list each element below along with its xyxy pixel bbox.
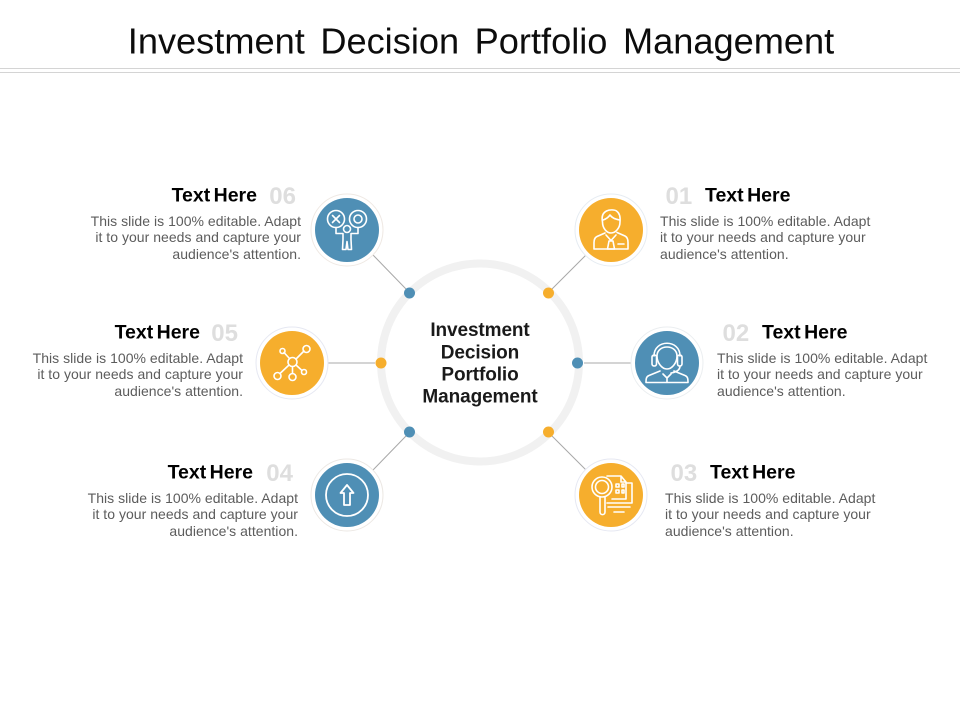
item 03: 03 bbox=[670, 460, 697, 487]
connector: 01 bbox=[543, 255, 586, 298]
item 04: Text Here bbox=[168, 462, 253, 484]
item 02: This slide is 100% editable. Adapt bbox=[717, 350, 927, 366]
item 03 bbox=[665, 460, 875, 539]
item 01: audience's attention. bbox=[660, 246, 789, 262]
center label: Investment bbox=[430, 320, 530, 341]
item 06: it to your needs and capture your bbox=[95, 229, 301, 245]
item 06 bbox=[91, 183, 301, 262]
item 02: it to your needs and capture your bbox=[717, 366, 923, 382]
item 03: it to your needs and capture your bbox=[665, 506, 871, 522]
center label: Portfolio bbox=[441, 364, 519, 386]
icon: 06 signs person bbox=[311, 194, 383, 266]
item 02 bbox=[717, 320, 927, 399]
item 05 bbox=[33, 320, 243, 399]
connector: 05 bbox=[328, 358, 386, 368]
connector: 06 bbox=[373, 255, 415, 298]
item 04: 04 bbox=[266, 460, 294, 487]
item 01: Text Here bbox=[705, 184, 791, 206]
icon: 03 magnifier document bbox=[575, 459, 647, 531]
connector: 02 bbox=[572, 358, 631, 368]
item 05: audience's attention. bbox=[114, 383, 243, 399]
item 02: Text Here bbox=[762, 322, 848, 344]
icon: 05 network nodes bbox=[256, 327, 328, 399]
icon: 01 businessman bbox=[575, 194, 647, 266]
item 04: This slide is 100% editable. Adapt bbox=[88, 490, 298, 506]
center ring bbox=[381, 264, 579, 462]
item 02: 02 bbox=[722, 320, 749, 347]
item 05: 05 bbox=[211, 320, 238, 347]
icon: 02 headset agent bbox=[631, 327, 703, 399]
item 06: audience's attention. bbox=[172, 246, 301, 262]
item 06: This slide is 100% editable. Adapt bbox=[91, 213, 301, 229]
item 03: audience's attention. bbox=[665, 523, 794, 539]
item 05: Text Here bbox=[115, 322, 200, 344]
center label: Decision bbox=[441, 342, 519, 364]
item 03: Text Here bbox=[710, 462, 796, 484]
item 04: it to your needs and capture your bbox=[92, 506, 298, 522]
icon: 04 up arrow bbox=[311, 459, 383, 531]
center label bbox=[422, 320, 538, 408]
item 05: This slide is 100% editable. Adapt bbox=[33, 350, 243, 366]
item 06: Text Here bbox=[172, 184, 257, 206]
title: Investment Decision Portfolio Management bbox=[128, 20, 834, 62]
item 01: it to your needs and capture your bbox=[660, 229, 866, 245]
item 03: This slide is 100% editable. Adapt bbox=[665, 490, 875, 506]
item 04: audience's attention. bbox=[169, 523, 298, 539]
center label: Management bbox=[422, 386, 538, 408]
connector: 03 bbox=[543, 426, 586, 470]
item 02: audience's attention. bbox=[717, 383, 846, 399]
connector: 04 bbox=[373, 426, 415, 470]
item 06: 06 bbox=[269, 183, 296, 210]
item 01 bbox=[660, 183, 870, 262]
item 05: it to your needs and capture your bbox=[37, 366, 243, 382]
item 01: This slide is 100% editable. Adapt bbox=[660, 213, 870, 229]
item 04 bbox=[88, 460, 298, 539]
item 01: 01 bbox=[666, 183, 692, 210]
